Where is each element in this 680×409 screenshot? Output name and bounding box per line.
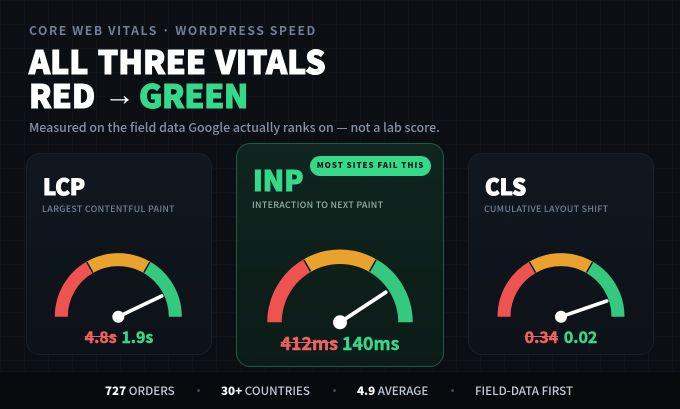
title: →: [104, 77, 135, 112]
title: RED: [29, 72, 95, 118]
panel: LCP: [26, 153, 212, 355]
LCP description: LARGEST CONTENTFUL PAINT: [42, 202, 175, 215]
LCP values: 4.8s 1.9s: [85, 324, 153, 348]
INP heading: INP: [253, 160, 303, 200]
CLS description: CUMULATIVE LAYOUT SHIFT: [484, 202, 608, 215]
stat: average: 4.9 AVERAGE: [357, 383, 428, 399]
subtitle: Measured on the field data Google actually ranks on — not a lab score.: [29, 118, 440, 136]
panel: INP: [236, 143, 444, 367]
eyebrow: CORE WEB VITALS · WORDPRESS SPEED: [29, 21, 317, 39]
INP values: 412ms 140ms: [281, 330, 399, 356]
separator dot: [451, 389, 454, 392]
stat: field data: FIELD-DATA FIRST: [475, 383, 573, 399]
stat: countries: 30+ COUNTRIES: [221, 383, 310, 399]
separator dot: [333, 389, 336, 392]
panel: CLS: [468, 153, 654, 355]
title: ALL THREE VITALS: [29, 38, 326, 84]
LCP heading: LCP: [43, 170, 85, 202]
stat: orders: 727 ORDERS: [105, 383, 175, 399]
badge: most sites fail this: [310, 156, 431, 176]
title: GREEN: [139, 72, 248, 118]
title: [28, 38, 326, 118]
separator dot: [197, 389, 200, 392]
CLS heading: CLS: [485, 170, 526, 202]
gauge: LCP: [61, 260, 175, 323]
gauge: INP: [274, 257, 406, 329]
INP description: INTERACTION TO NEXT PAINT: [252, 198, 383, 211]
bottom stats bar: [0, 371, 680, 409]
badge: most sites fail this: MOST SITES FAIL THIS: [317, 160, 424, 171]
gauge: CLS: [504, 260, 618, 323]
CLS values: 0.34 0.02: [525, 324, 597, 348]
